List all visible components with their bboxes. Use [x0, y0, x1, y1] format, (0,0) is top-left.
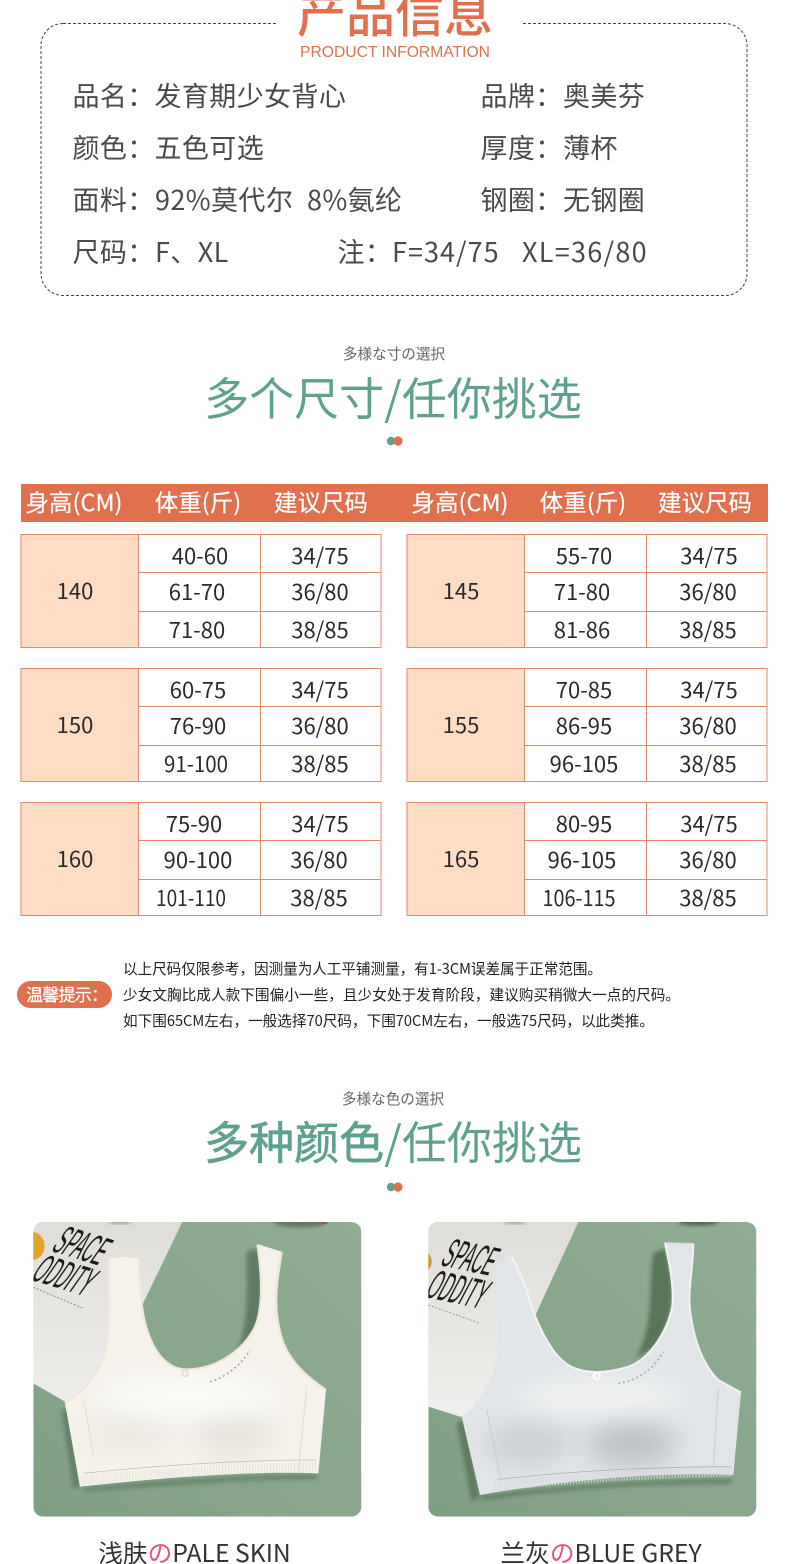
section heading: colours: 多様な色の選択	[342, 1088, 444, 1109]
spec rows: 颜色：	[72, 127, 155, 166]
size table: 145	[407, 534, 767, 648]
size table: 160: 75-90	[166, 807, 222, 839]
spec rows: 薄杯	[563, 127, 618, 166]
size table: 150: 150	[57, 708, 93, 740]
product photo: blue grey: SPACE	[434, 1232, 506, 1285]
size table: 165: 96-105	[548, 843, 616, 875]
spec rows: 厚度：	[480, 127, 563, 166]
size table: 145: 34/75	[680, 539, 738, 571]
table header bar: 建议尺码	[274, 484, 368, 518]
section heading: sizes	[204, 343, 582, 446]
table header bar: 体重(斤)	[540, 484, 626, 518]
section heading: colours: 多种颜色/任你挑选	[204, 1107, 582, 1172]
size table: 150	[21, 668, 381, 782]
spec rows: 奥美芬	[563, 75, 645, 114]
size table: 140	[21, 534, 381, 648]
size table: 155: 36/80	[679, 709, 737, 741]
product photo: blue grey	[408, 1219, 756, 1517]
size table: 150: 76-90	[170, 709, 226, 741]
size table: 160: 38/85	[290, 881, 348, 913]
table header bar: 建议尺码	[658, 484, 752, 518]
size table: 155: 155	[443, 708, 479, 740]
spec rows: 品牌：	[480, 75, 563, 114]
subtitle: english: PRODUCT INFORMATION	[300, 44, 490, 61]
spec rows: 92%莫代尔	[155, 179, 293, 218]
size table: 155: 96-105	[550, 747, 618, 779]
section heading: colours	[204, 1088, 582, 1192]
size table: 145: 145	[443, 574, 479, 606]
table header bar	[21, 484, 768, 522]
size table: 160: 90-100	[164, 843, 232, 875]
size table: 140: 38/85	[291, 613, 349, 645]
size table: 140: 71-80	[169, 613, 225, 645]
callout: sizing tips: 以上尺码仅限参考，因测量为人工平铺测量，有1-3CM误差属于正常范围。	[123, 958, 602, 979]
size table: 165: 38/85	[679, 881, 737, 913]
spec rows: 尺码：	[72, 231, 155, 270]
size table: 165: 36/80	[679, 843, 737, 875]
size table: 150: 38/85	[291, 747, 349, 779]
size table: 150: 36/80	[291, 709, 349, 741]
spec rows	[72, 75, 647, 270]
size table: 140: 34/75	[291, 539, 349, 571]
panel: product information	[41, 0, 747, 296]
callout: sizing tips: 如下围65CM左右，一般选择70尺码，下围70CM左右，一般选75尺码，以此类推。	[123, 1010, 654, 1031]
size table: 145: 36/80	[679, 575, 737, 607]
size table: 145: 55-70	[556, 539, 612, 571]
spec rows: F=34/75	[392, 231, 499, 270]
spec rows: 五色可选	[154, 127, 264, 166]
size table: 140: 40-60	[172, 539, 228, 571]
size table: 160: 36/80	[290, 843, 348, 875]
table header bar: 身高(CM)	[412, 484, 508, 518]
spec rows: 品名：	[72, 75, 155, 114]
size table: 145: 38/85	[679, 613, 737, 645]
size table: 140: 61-70	[169, 575, 225, 607]
spec rows: 钢圈：	[480, 179, 563, 218]
size table: 160: 34/75	[291, 807, 349, 839]
spec rows: 无钢圈	[563, 179, 645, 218]
size table: 160	[21, 802, 381, 916]
spec rows: 8%氨纶	[307, 179, 402, 218]
size table: 150: 60-75	[170, 673, 226, 705]
spec rows: F、XL	[155, 231, 229, 270]
size table: 160: 160	[57, 842, 93, 874]
size table: 165: 106-115	[542, 881, 616, 913]
callout: sizing tips: 温馨提示：	[26, 981, 108, 1006]
size table: 155: 34/75	[680, 673, 738, 705]
product photo: pale skin	[15, 1217, 361, 1517]
size table: 165: 34/75	[680, 807, 738, 839]
size table: 165: 80-95	[556, 807, 612, 839]
size table: 155	[407, 668, 767, 782]
size table: 150: 34/75	[291, 673, 349, 705]
size table: 155: 70-85	[556, 673, 612, 705]
table header bar: 体重(斤)	[155, 484, 241, 518]
table header bar: 身高(CM)	[26, 484, 122, 518]
spec rows: 注：	[338, 231, 392, 270]
size table: 155: 86-95	[556, 709, 612, 741]
callout: sizing tips	[17, 958, 680, 1031]
size table: 140: 36/80	[291, 575, 349, 607]
size table: 140: 140	[57, 574, 93, 606]
spec rows: 面料：	[72, 179, 155, 218]
product photo: blue grey: ODDITY	[419, 1263, 497, 1318]
callout: sizing tips: 少女文胸比成人款下围偏小一些，且少女处于发育阶段，建议购买稍微大一点的尺码。	[123, 984, 680, 1005]
size table: 145: 71-80	[554, 575, 610, 607]
size table: 155: 38/85	[679, 747, 737, 779]
size table: 160: 101-110	[156, 881, 226, 913]
size table: 145: 81-86	[554, 613, 610, 645]
spec rows: XL=36/80	[522, 231, 647, 270]
section heading: sizes: 多个尺寸/任你挑选	[204, 363, 582, 428]
spec rows: 发育期少女背心	[154, 75, 346, 114]
size table: 165: 165	[443, 842, 479, 874]
section heading: sizes: 多様な寸の選択	[343, 343, 445, 364]
size table: 150: 91-100	[164, 747, 228, 779]
size table: 165	[407, 802, 767, 916]
product photo: pale skin: SPACE	[44, 1219, 120, 1274]
product photo: pale skin: ODDITY	[23, 1247, 106, 1304]
